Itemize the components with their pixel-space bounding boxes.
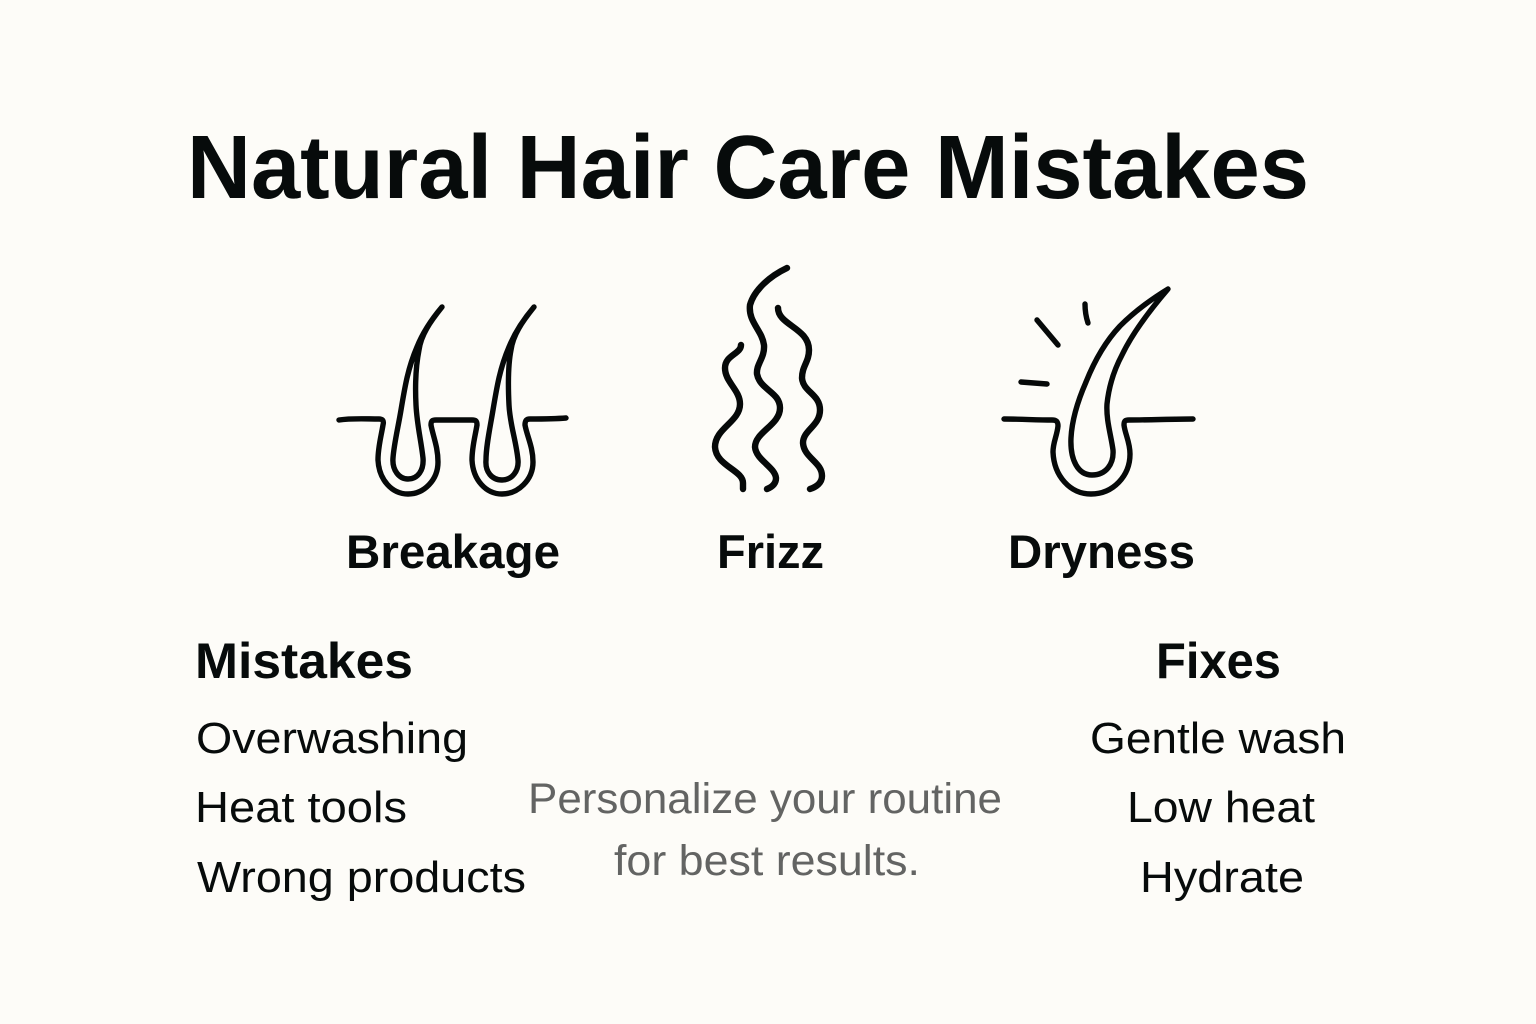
note line 2: for best results.: [614, 837, 920, 885]
item: wrong products: Wrong products: [197, 853, 526, 902]
label: breakage: Breakage: [346, 525, 560, 578]
item: heat tools: Heat tools: [195, 783, 407, 832]
item: overwashing: Overwashing: [196, 714, 468, 763]
icon: breakage, two hair follicles: [339, 307, 566, 494]
panel: fixes list: [1090, 633, 1346, 902]
icon: frizz, three wavy strands: [715, 268, 822, 489]
title: Natural Hair Care Mistakes: [187, 118, 1309, 218]
label: dryness: Dryness: [1008, 525, 1195, 578]
center note: [528, 775, 1002, 885]
item: gentle wash: Gentle wash: [1090, 714, 1346, 763]
heading: fixes: Fixes: [1156, 633, 1281, 689]
note line 1: Personalize your routine: [528, 775, 1002, 823]
item: low heat: Low heat: [1127, 783, 1315, 832]
icon: dryness, single hair follicle with spark lines: [1004, 289, 1193, 494]
heading: mistakes: Mistakes: [195, 633, 413, 689]
label: frizz: Frizz: [717, 525, 824, 578]
icon labels: [346, 525, 1195, 578]
panel: mistakes list: [195, 633, 526, 902]
item: hydrate: Hydrate: [1140, 853, 1304, 902]
